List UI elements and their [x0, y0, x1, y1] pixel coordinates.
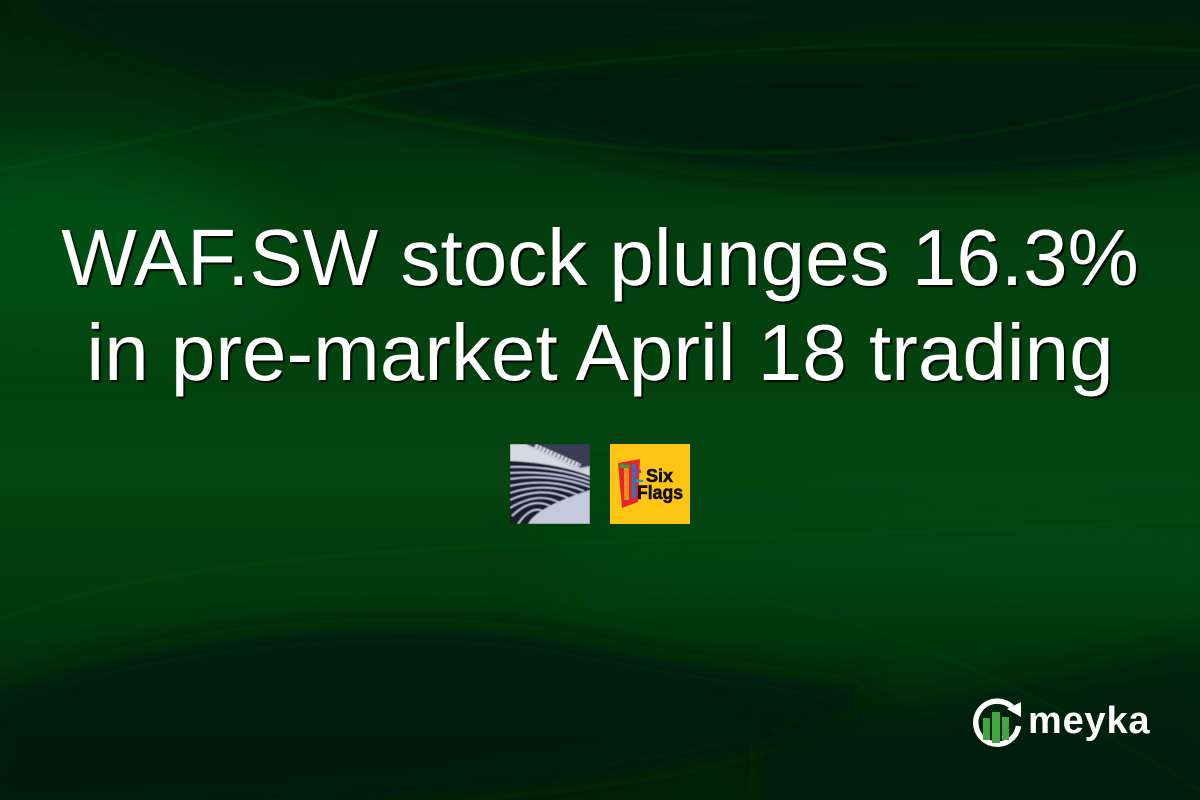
title	[61, 213, 1139, 399]
logo: Six Flags	[610, 444, 690, 524]
title: WAF.SW stock plunges 16.3%	[61, 213, 1139, 302]
logo: WAF metal ribbed image	[510, 444, 590, 524]
title: in pre-market April 18 trading	[86, 308, 1114, 397]
logo: Six Flags: Flags	[637, 483, 683, 504]
icon: meyka circular arrow with bars	[976, 701, 1021, 744]
logo: meyka	[973, 698, 1150, 747]
wordmark: meyka: meyka	[1028, 700, 1150, 742]
logo: Six Flags: Six	[646, 466, 673, 486]
